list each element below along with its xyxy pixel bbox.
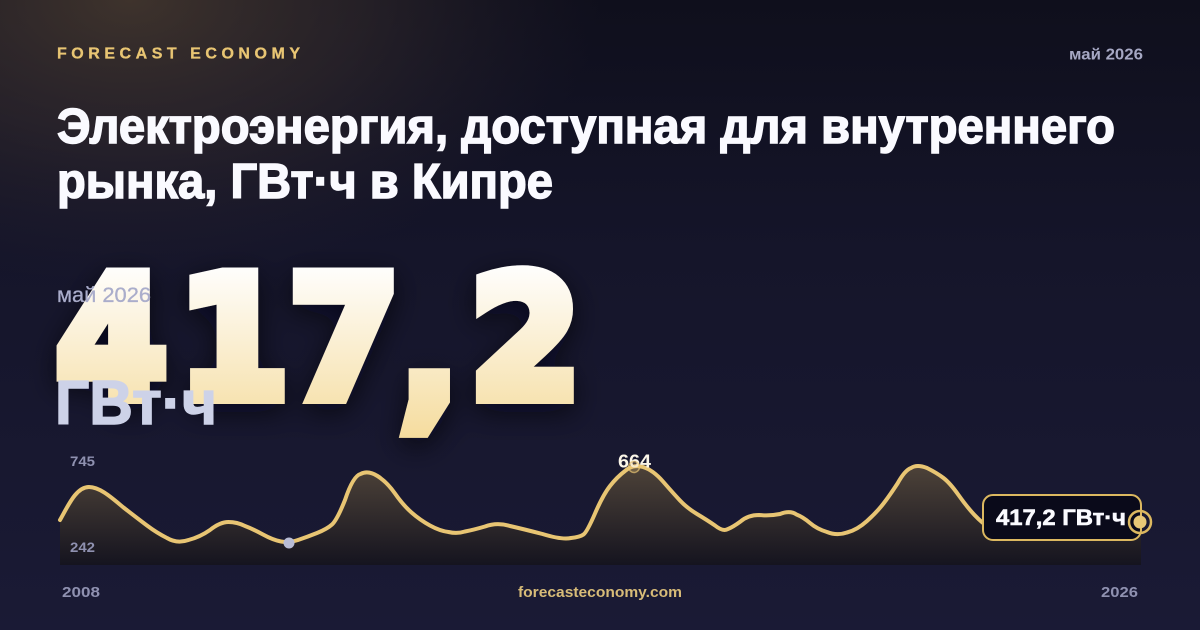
title — [57, 99, 1115, 209]
line chart — [60, 452, 1151, 565]
title: Электроэнергия, доступная для внутреннего — [57, 99, 1115, 154]
chart line — [60, 466, 990, 542]
brand label: FORECAST ECONOMY — [57, 46, 300, 62]
period label: май 2026 — [57, 284, 151, 307]
big value: 2 — [470, 241, 581, 437]
end year label: 2026 — [1101, 584, 1138, 601]
big value — [56, 241, 581, 447]
peak value label: 664 — [618, 452, 651, 472]
latest value callout: 417,2 ГВт·ч — [996, 505, 1126, 530]
axis max label: 745 — [70, 453, 95, 469]
axis min label: 242 — [70, 539, 95, 555]
source link: forecasteconomy.com — [518, 584, 682, 601]
date top right: май 2026 — [1069, 46, 1143, 64]
peak point marker — [628, 462, 640, 472]
big value: 417 — [56, 241, 400, 437]
title: рынка, ГВт·ч в Кипре — [57, 154, 553, 209]
latest value callout — [983, 495, 1141, 540]
start year label: 2008 — [62, 584, 100, 601]
latest point marker — [1129, 511, 1151, 533]
big value: , — [399, 251, 460, 447]
chart area fill — [60, 466, 1141, 565]
minimum point marker — [284, 538, 294, 548]
unit label: ГВт·ч — [55, 369, 217, 438]
